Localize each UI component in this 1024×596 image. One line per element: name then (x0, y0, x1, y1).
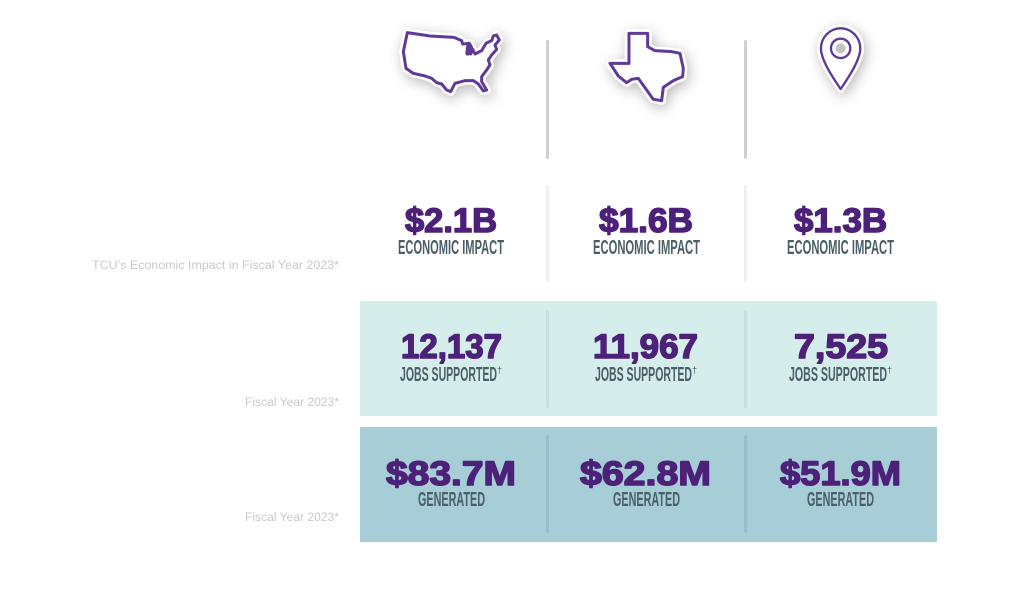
stat: 7,525 jobs supported (789, 328, 892, 386)
stat: $83.7M generated: $83.7M (386, 455, 516, 493)
stat: $2.1B economic impact: $2.1B (405, 202, 497, 240)
stat: $51.9M generated: GENERATED (807, 489, 874, 511)
stat: $2.1B economic impact: ECONOMIC IMPACT (398, 237, 504, 259)
stat: $62.8M generated: $62.8M (580, 455, 711, 493)
stat: $51.9M generated (780, 455, 901, 511)
stat: 11,967 jobs supported (593, 328, 698, 386)
stat: $51.9M generated: $51.9M (780, 455, 901, 493)
stat: 12,137 jobs supported: 12,137 (401, 328, 502, 366)
stat: 11,967 jobs supported: JOBS SUPPORTED (595, 364, 692, 386)
side label: jobs fiscal year: Fiscal Year 2023* (245, 397, 340, 409)
stat: $83.7M generated: GENERATED (418, 489, 485, 511)
stat: 7,525 jobs supported: † (887, 365, 892, 375)
stat: $62.8M generated: GENERATED (613, 489, 680, 511)
stat: 12,137 jobs supported (400, 328, 502, 386)
panel: generated band (360, 427, 937, 542)
icon: Texas outline (610, 33, 683, 101)
side label: generated fiscal year: Fiscal Year 2023* (245, 512, 340, 524)
stat: 7,525 jobs supported: JOBS SUPPORTED (789, 364, 887, 386)
stat: $1.6B economic impact (593, 202, 700, 259)
panel: jobs supported band (360, 301, 937, 416)
icon: United States outline (403, 33, 499, 92)
stat: $83.7M generated (386, 455, 516, 511)
stat: 12,137 jobs supported: JOBS SUPPORTED (400, 364, 497, 386)
stat: $62.8M generated (580, 455, 711, 511)
side label: economic impact: TCU’s Economic Impact in Fiscal Year 2023* (92, 260, 340, 272)
stat: $2.1B economic impact (398, 202, 504, 259)
icon: location pin (821, 28, 860, 89)
stat: 11,967 jobs supported: † (692, 365, 697, 375)
stat: $1.3B economic impact: ECONOMIC IMPACT (787, 237, 894, 259)
stat: $1.3B economic impact (787, 202, 894, 259)
stat: $1.6B economic impact: ECONOMIC IMPACT (593, 237, 700, 259)
stat: $1.6B economic impact: $1.6B (599, 202, 693, 240)
stat: 7,525 jobs supported: 7,525 (794, 328, 888, 366)
stat: 12,137 jobs supported: † (497, 365, 502, 375)
stat: 11,967 jobs supported: 11,967 (593, 328, 698, 366)
stat: $1.3B economic impact: $1.3B (794, 202, 887, 240)
